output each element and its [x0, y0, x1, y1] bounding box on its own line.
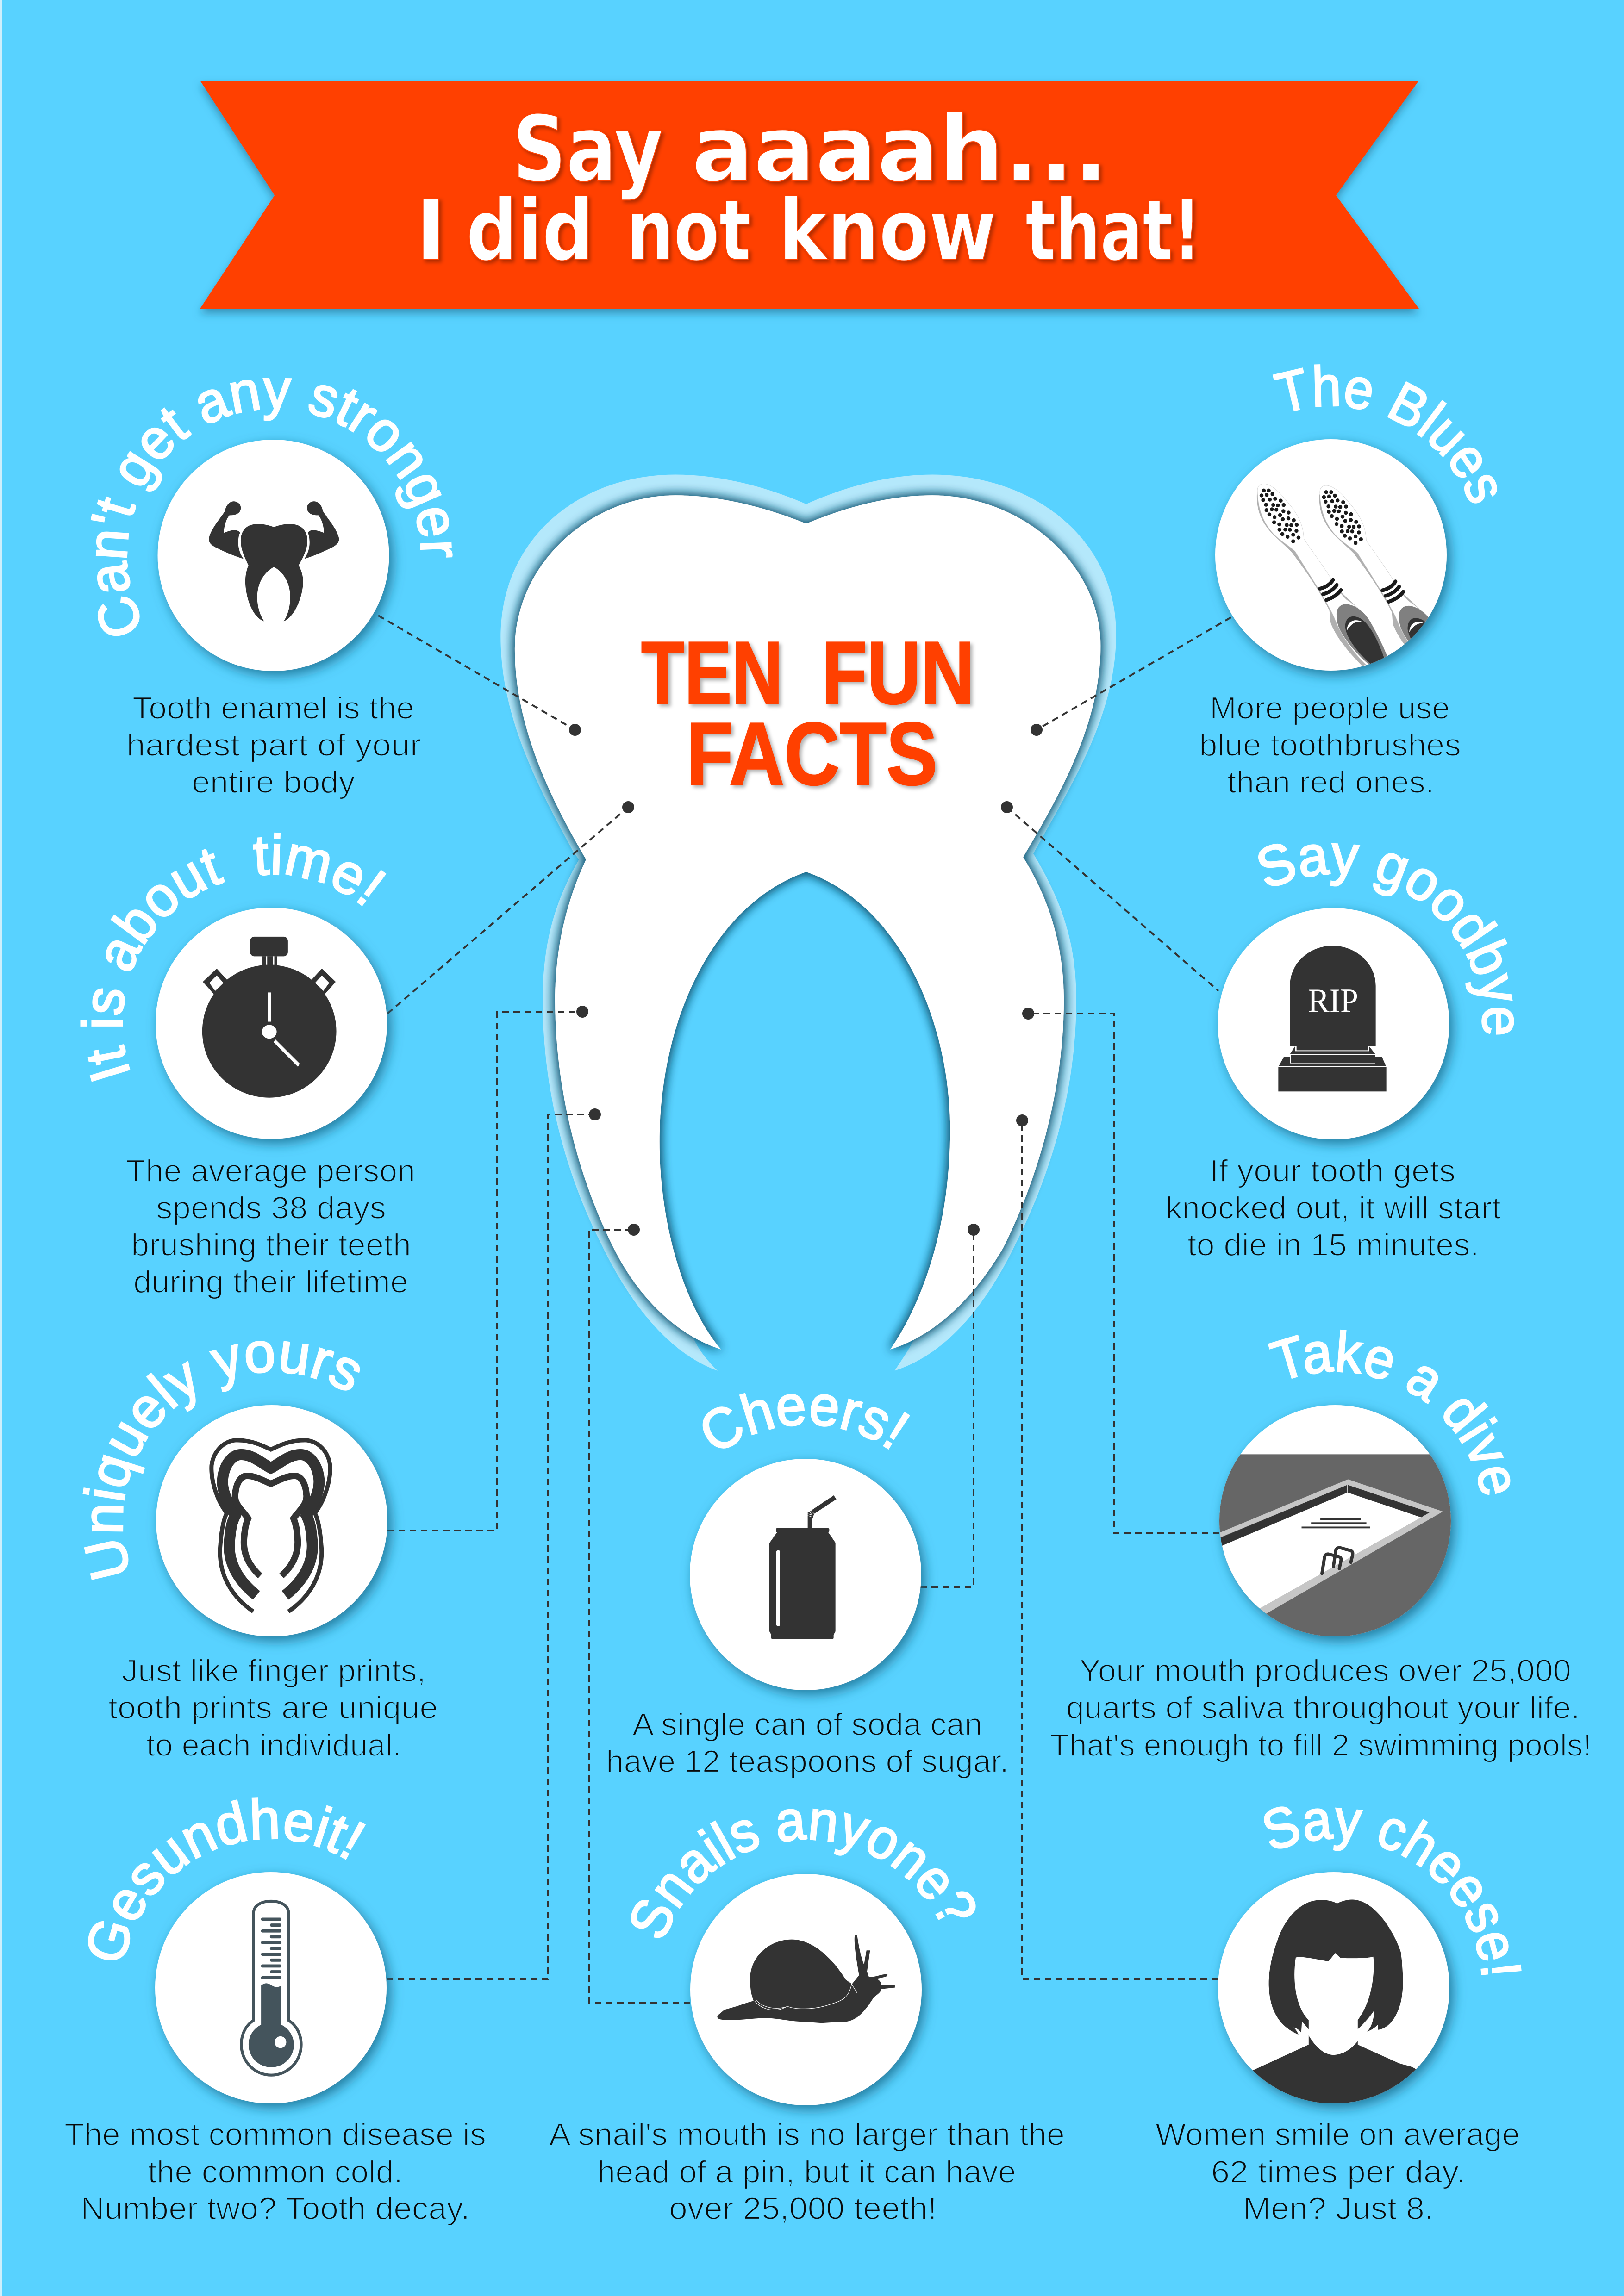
title text [415, 97, 1201, 280]
fact text: 62 times per day. [1211, 2154, 1466, 2190]
fact text: Your mouth produces over 25,000 [1079, 1653, 1571, 1688]
fact text [1199, 691, 1461, 800]
fact text [1156, 2117, 1520, 2226]
panel: the blues [1202, 364, 1497, 793]
heading: It is about time! [71, 823, 396, 1089]
heading: Say goodbye [1248, 823, 1534, 1037]
icon: tombstone [1218, 908, 1449, 1139]
icon: soda can [690, 1459, 921, 1690]
title text: did [466, 181, 593, 280]
fact text [64, 2117, 486, 2226]
fact text: the common cold. [148, 2154, 403, 2190]
heading: Uniquely yours [71, 1320, 374, 1586]
fact text: entire body [192, 765, 355, 800]
panel: cheers [606, 1373, 1009, 1779]
panel: say cheese [1156, 1787, 1533, 2226]
tooth body [515, 495, 1101, 1350]
fact text: The most common disease is [64, 2117, 486, 2152]
fact text: over 25,000 teeth! [669, 2191, 937, 2226]
connector lines [378, 616, 1231, 2003]
title banner [200, 81, 1419, 309]
heading: Can't get any stronger [75, 357, 472, 647]
icon: muscular tooth [157, 440, 389, 671]
fact text: tooth prints are unique [108, 1690, 438, 1725]
fact text: The average person [126, 1153, 415, 1188]
heading: Gesundheit! [73, 1787, 375, 1970]
fact text: head of a pin, but it can have [597, 2154, 1016, 2190]
fact text: have 12 teaspoons of sugar. [606, 1744, 1009, 1779]
icon: woman [1218, 1872, 1449, 2117]
fact text: A single can of soda can [632, 1707, 982, 1742]
fact text: than red ones. [1227, 765, 1434, 800]
fact text [1050, 1653, 1592, 1763]
fact text: during their lifetime [133, 1264, 408, 1300]
panel: can't get any stronger [75, 357, 472, 800]
fact text: Just like finger prints, [122, 1653, 426, 1688]
heading: Say cheese! [1255, 1787, 1533, 1980]
fact text: More people use [1210, 691, 1450, 726]
fact text: Tooth enamel is the [132, 691, 414, 726]
fact text: spends 38 days [156, 1190, 386, 1226]
fact text: blue toothbrushes [1199, 728, 1461, 763]
banner ribbon [200, 81, 1419, 309]
title text: not [626, 181, 751, 280]
fact text: That's enough to fill 2 swimming pools! [1050, 1728, 1592, 1763]
ten fun facts heading: TEN [641, 623, 783, 722]
panel: snails anyone [549, 1788, 1065, 2226]
fact text [549, 2117, 1065, 2226]
panel: say goodbye [1166, 823, 1534, 1263]
heading: Cheers! [689, 1373, 920, 1465]
tooth halo [500, 475, 1116, 1371]
icon: swimming pool [1212, 1405, 1460, 1649]
panel: take a dive [1050, 1320, 1592, 1763]
icon: tombstone: RIP [1308, 982, 1358, 1020]
heading: Take a dive [1264, 1320, 1532, 1502]
ten fun facts heading: FACTS [687, 704, 937, 803]
icon: tooth print [156, 1405, 387, 1636]
icon: stopwatch [156, 908, 387, 1139]
fact text: hardest part of your [126, 728, 421, 763]
title text: know [779, 181, 996, 280]
fact text: to each individual. [146, 1728, 401, 1763]
title text: Say [512, 97, 663, 202]
heading: Snails anyone? [616, 1788, 990, 1948]
fact text [126, 691, 421, 800]
fact text: knocked out, it will start [1166, 1190, 1501, 1226]
fact text: Women smile on average [1156, 2117, 1520, 2152]
fact text [1166, 1153, 1501, 1263]
panel: it is about time [71, 823, 415, 1300]
title text: I [415, 181, 447, 280]
fact text: quarts of saliva throughout your life. [1066, 1690, 1580, 1725]
ten fun facts heading: FUN [822, 623, 974, 722]
connector dots [569, 724, 1043, 1236]
central tooth [500, 475, 1116, 1371]
panel: gesundheit [64, 1787, 486, 2226]
ten fun facts heading [641, 623, 974, 803]
panel: uniquely yours [71, 1320, 438, 1763]
icon: toothbrushes [1215, 439, 1449, 671]
fact text: A snail's mouth is no larger than the [549, 2117, 1065, 2152]
fact text [108, 1653, 438, 1763]
fact text: Number two? Tooth decay. [81, 2191, 470, 2226]
fact text [606, 1707, 1009, 1779]
fact text: brushing their teeth [131, 1227, 411, 1263]
title text: that! [1025, 181, 1201, 280]
fact text: Men? Just 8. [1243, 2191, 1434, 2226]
icon: thermometer [155, 1872, 387, 2103]
heading: The Blues [1269, 355, 1519, 512]
icon: snail [690, 1874, 922, 2105]
title text: aaaah... [692, 97, 1108, 202]
fact text [126, 1153, 415, 1300]
fact text: If your tooth gets [1210, 1153, 1455, 1188]
fact text: to die in 15 minutes. [1187, 1227, 1479, 1263]
